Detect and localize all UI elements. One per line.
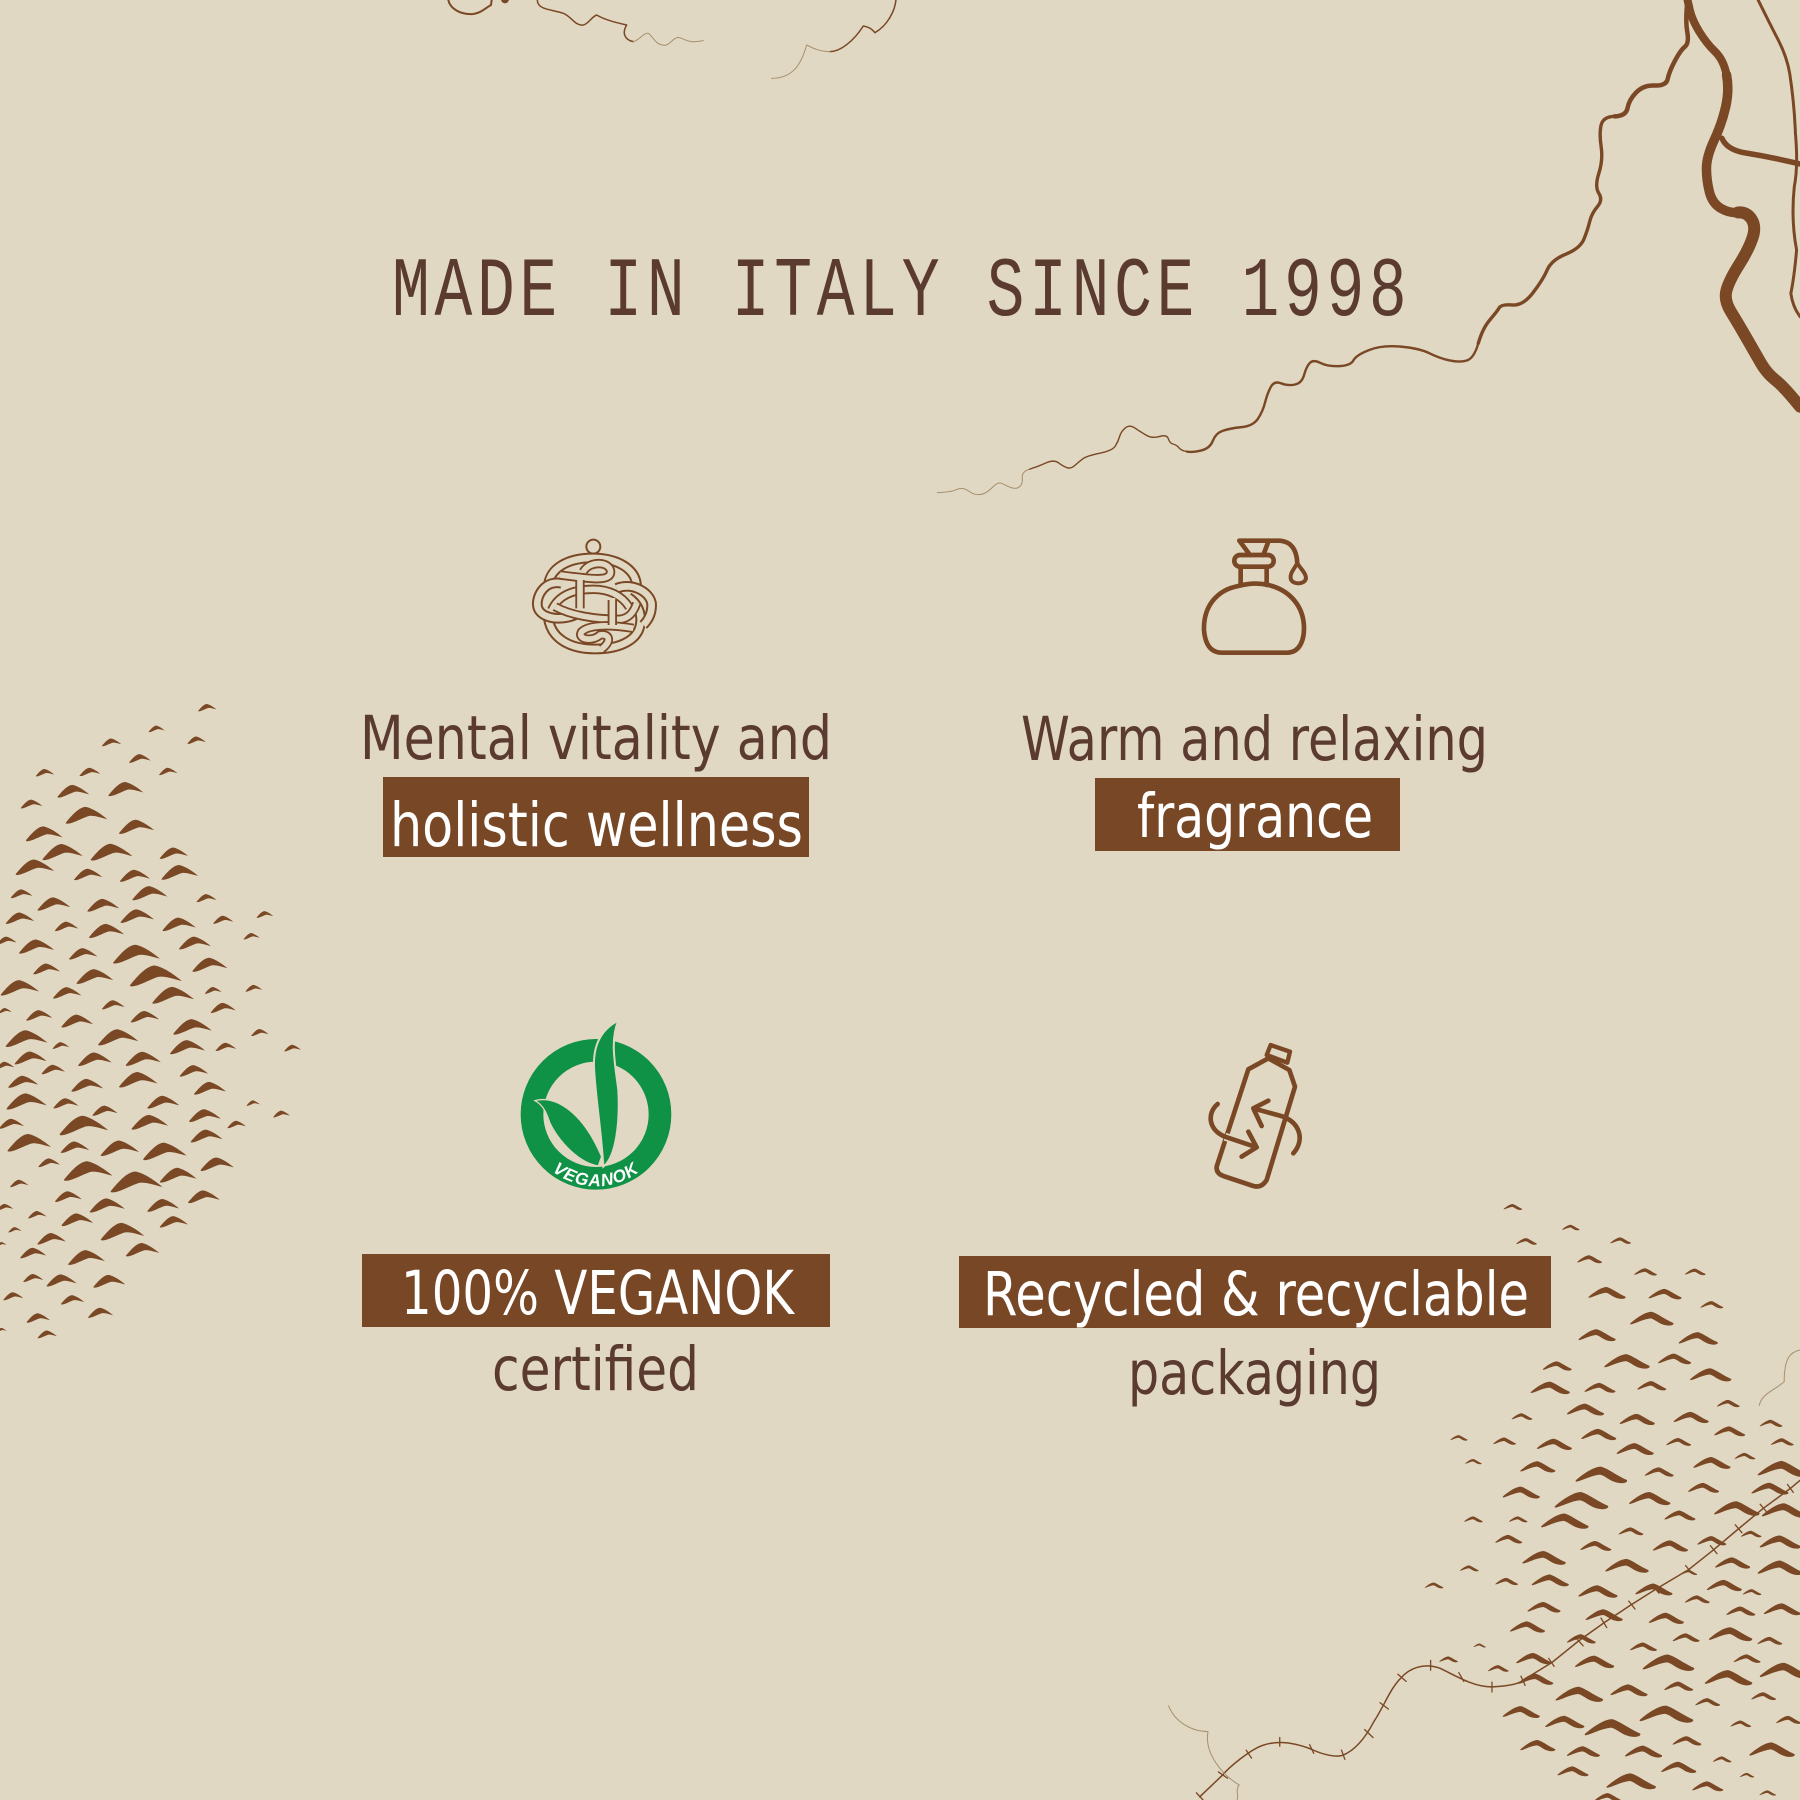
text: warm and relaxing: Warm and relaxing [1021, 704, 1488, 775]
bird flock: bottom right [1425, 1204, 1800, 1800]
text: certified: certified [492, 1334, 699, 1405]
river: top centre map lines [448, 0, 896, 78]
panel: packaging [959, 1045, 1551, 1409]
icon: perfume bottle [1204, 541, 1306, 653]
river: bottom right barbed line [1169, 1350, 1800, 1800]
highlight: recycled and recyclable: Recycled & recyclable [983, 1259, 1529, 1330]
river: top right map line [937, 0, 1800, 495]
icon: veganok logo: VEGANOK [554, 1161, 638, 1186]
panel: veganok [362, 1022, 830, 1405]
highlight: 100% veganok: 100% VEGANOK [401, 1258, 796, 1329]
text: packaging: packaging [1128, 1338, 1381, 1409]
highlight: fragrance: fragrance [1137, 781, 1373, 852]
icon: recycled bottle [1211, 1045, 1300, 1186]
highlight: holistic wellness: holistic wellness [390, 790, 803, 861]
title: MADE IN ITALY SINCE 1998 [392, 246, 1407, 341]
bird flock: left [0, 704, 301, 1338]
text: mental vitality and: Mental vitality and [360, 703, 832, 774]
panel: mental vitality [360, 540, 832, 861]
icon: celtic knot [537, 540, 652, 649]
panel: fragrance [1021, 541, 1488, 852]
icon: veganok logo [520, 1022, 672, 1190]
